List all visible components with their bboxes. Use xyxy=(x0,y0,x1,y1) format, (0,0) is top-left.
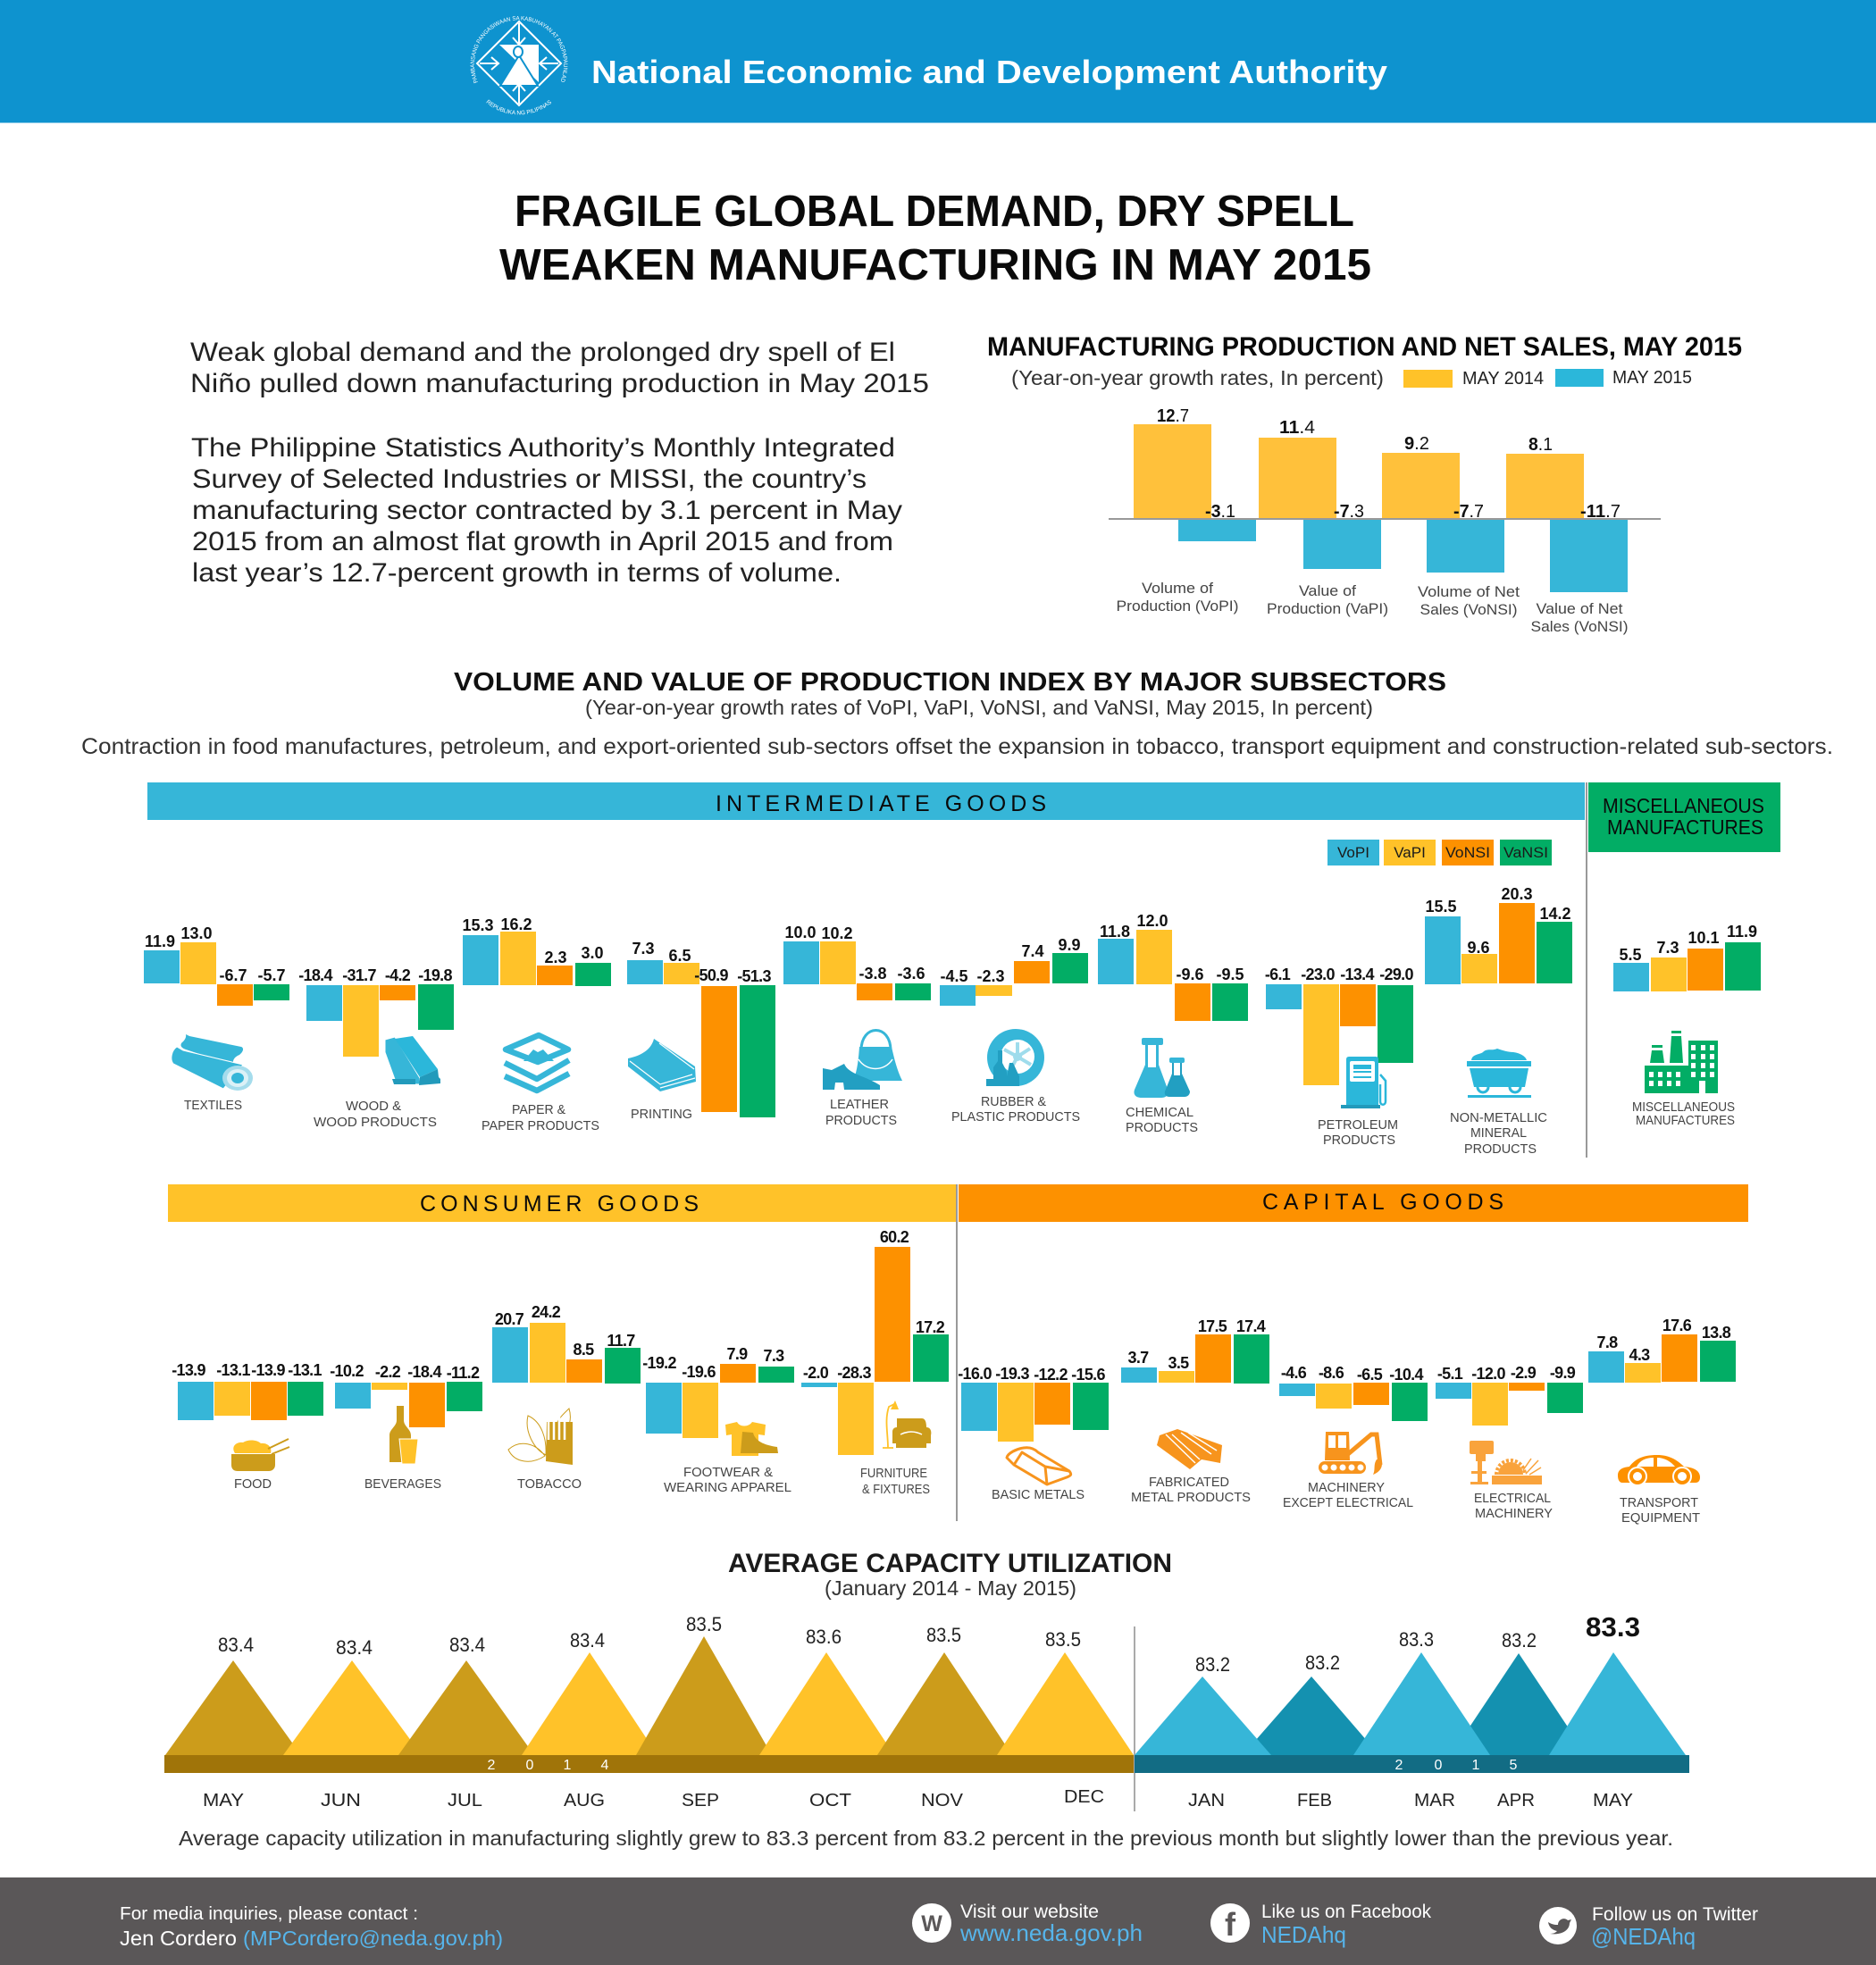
label: paper xyxy=(482,1102,599,1133)
bars: miscellaneous: 11.9 xyxy=(1727,923,1757,941)
intro text block: manufacturing sector contracted by 3.1 percent in May xyxy=(192,496,902,525)
label: electrical machinery: MACHINERY xyxy=(1475,1506,1553,1521)
band: capital goods xyxy=(959,1184,1748,1222)
capacity heading xyxy=(728,1549,1172,1600)
header band xyxy=(0,0,1876,123)
mountain chart: 2015: 83.3 xyxy=(1586,1611,1640,1643)
mountain chart: 2014: 83.4 xyxy=(336,1636,373,1659)
bars: footwear: 7.3 xyxy=(764,1347,784,1365)
mountain chart: 2014: 0 xyxy=(526,1758,534,1773)
mountain chart: 2014: NOV xyxy=(921,1791,964,1810)
label: petroleum xyxy=(1318,1117,1398,1148)
bars: wood: -4.2 xyxy=(385,966,411,984)
website link: W xyxy=(921,1911,942,1936)
bars: petroleum: -23.0 xyxy=(1301,966,1335,983)
bars: printing: 7.3 xyxy=(632,940,655,957)
mountain chart: 2015: JAN xyxy=(1188,1791,1225,1810)
intro text block: Weak global demand and the prolonged dry spell of El xyxy=(190,338,895,367)
icon: NEDA logo: PAMBANSANG PANGASIWAAN SA KABUHAYAN AT PAGPAPAUNLAD xyxy=(470,16,568,84)
bars: fabricated metal: 17.5 xyxy=(1198,1317,1227,1335)
icon: metal ingot xyxy=(1007,1448,1071,1484)
band: intermediate goods xyxy=(147,782,1585,820)
bars: textiles: -5.7 xyxy=(257,966,286,984)
label: rubber and plastic: RUBBER & xyxy=(981,1094,1046,1109)
bars: paper: 15.3 xyxy=(462,916,494,934)
footer xyxy=(0,1877,1876,1965)
bars: beverages: -2.2 xyxy=(375,1363,401,1381)
mountain chart: 2014: 83.4 xyxy=(218,1634,254,1656)
bars: furniture: -28.3 xyxy=(837,1364,871,1382)
media contact: Jen Cordero xyxy=(120,1927,237,1950)
bars: paper: 3.0 xyxy=(581,944,604,962)
mountain chart: 2015: 0 xyxy=(1435,1758,1443,1773)
mountain chart: 2014: SEP xyxy=(682,1791,719,1810)
label: rubber and plastic: PLASTIC PRODUCTS xyxy=(951,1109,1080,1125)
legend: index colors: VoPI xyxy=(1337,844,1369,861)
bars: food: -13.9 xyxy=(172,1361,205,1379)
bars: miscellaneous xyxy=(1613,923,1761,991)
bars: chemical: 12.0 xyxy=(1136,912,1168,930)
mountain chart: 2015: 83.2 xyxy=(1502,1629,1537,1651)
bars: non-metallic: 14.2 xyxy=(1539,905,1571,923)
section heading: production index: Contraction in food manufactures, petroleum, and export-oriented sub-sectors offset the expansion in tobacco, transport equipment and construction-related sub-sectors. xyxy=(81,734,1833,759)
bars: wood: -31.7 xyxy=(342,966,376,984)
twitter link: @NEDAhq xyxy=(1591,1923,1696,1950)
bars: footwear: 7.9 xyxy=(727,1345,748,1363)
label: leather xyxy=(825,1097,897,1128)
bars: wood: -18.4 xyxy=(298,966,332,984)
label: transport: EQUIPMENT xyxy=(1621,1510,1700,1526)
main title xyxy=(499,188,1371,289)
main title: WEAKEN MANUFACTURING IN MAY 2015 xyxy=(499,241,1371,289)
media contact xyxy=(120,1904,503,1950)
bars: chemical: -9.6 xyxy=(1176,966,1204,983)
media contact: For media inquiries, please contact : xyxy=(120,1904,418,1924)
bars: machinery: -8.6 xyxy=(1319,1364,1344,1382)
bars: non-metallic: 20.3 xyxy=(1501,885,1533,903)
bars: leather: 10.2 xyxy=(821,924,853,942)
bars: electrical machinery: -5.1 xyxy=(1437,1365,1463,1383)
bars: transport xyxy=(1588,1317,1736,1383)
label: paper: PAPER & xyxy=(512,1102,565,1117)
bar chart: 9.2 xyxy=(1404,434,1429,454)
label: non-metallic: NON-METALLIC xyxy=(1450,1110,1547,1125)
bars: footwear: -19.6 xyxy=(682,1363,716,1381)
legend: MAY 2015 xyxy=(1612,368,1692,388)
label: non-metallic: MINERAL xyxy=(1470,1125,1527,1141)
bars: food: -13.9 xyxy=(251,1361,285,1379)
bar chart: Sales (VoNSI) xyxy=(1531,618,1628,635)
bars: electrical machinery: -9.9 xyxy=(1550,1364,1576,1382)
intro text block: 2015 from an almost flat growth in April 2015 and from xyxy=(192,527,893,556)
label: wood: WOOD & xyxy=(346,1099,401,1114)
intro text block: Niño pulled down manufacturing production in May 2015 xyxy=(190,369,929,398)
label: leather: LEATHER xyxy=(830,1097,889,1112)
bars: rubber and plastic: -4.5 xyxy=(940,967,968,985)
label: miscellaneous: MISCELLANEOUS xyxy=(1632,1100,1735,1115)
icon: NEDA logo: REPUBLIKA NG PILIPINAS xyxy=(486,100,551,114)
label: footwear: WEARING APPAREL xyxy=(664,1480,791,1495)
label: non-metallic xyxy=(1450,1110,1547,1157)
chart subtitle: (Year-on-year growth rates, In percent) xyxy=(1011,366,1384,389)
label: textiles: TEXTILES xyxy=(184,1098,242,1113)
capacity heading: (January 2014 - May 2015) xyxy=(825,1576,1076,1600)
bar chart: 8.1 xyxy=(1528,435,1553,455)
bars: transport: 4.3 xyxy=(1629,1346,1650,1364)
bars: textiles: -6.7 xyxy=(219,966,247,984)
legend: index colors: VaNSI xyxy=(1503,844,1548,861)
label: electrical machinery xyxy=(1474,1491,1553,1521)
mountain chart: 2015: 83.2 xyxy=(1195,1653,1230,1676)
bar chart: Production (VoPI) xyxy=(1117,598,1238,615)
bars: leather xyxy=(783,924,931,1000)
facebook link: f xyxy=(1225,1906,1236,1943)
bars: leather: 10.0 xyxy=(784,924,817,941)
bars: tobacco: 24.2 xyxy=(532,1303,561,1321)
label: footwear: FOOTWEAR & xyxy=(683,1465,773,1480)
bar chart: Production (VaPI) xyxy=(1267,600,1388,617)
label: leather: PRODUCTS xyxy=(825,1113,897,1128)
band: consumer goods xyxy=(168,1184,956,1222)
mountain chart: 2015: 5 xyxy=(1510,1758,1518,1773)
mountain chart: 2015: MAR xyxy=(1414,1791,1455,1810)
legend: MAY 2014 xyxy=(1462,369,1544,389)
intro text block: The Philippine Statistics Authority’s Monthly Integrated xyxy=(191,433,895,463)
bars: furniture: -2.0 xyxy=(803,1364,829,1382)
bars: beverages xyxy=(330,1362,482,1427)
label: chemical: CHEMICAL xyxy=(1126,1105,1193,1120)
legend: index colors: VoNSI xyxy=(1445,844,1490,861)
bars: leather: -3.6 xyxy=(897,965,925,982)
intro text block xyxy=(190,338,929,588)
icon: flasks xyxy=(1134,1038,1190,1098)
mountain chart: 2015: 83.2 xyxy=(1305,1651,1340,1674)
bars: beverages: -10.2 xyxy=(330,1362,364,1380)
panel: manufacturing production and net sales xyxy=(987,332,1742,635)
chart heading: MANUFACTURING PRODUCTION AND NET SALES, MAY 2015 xyxy=(987,332,1742,362)
icon: shirt and boot xyxy=(725,1422,778,1456)
mountain chart: 2014: 83.4 xyxy=(570,1629,605,1651)
bars: tobacco: 8.5 xyxy=(574,1341,594,1359)
band: capital goods: CAPITAL GOODS xyxy=(1262,1190,1503,1215)
bars: electrical machinery xyxy=(1436,1364,1583,1426)
bars: miscellaneous: 7.3 xyxy=(1656,939,1679,957)
bars: paper: 2.3 xyxy=(544,949,567,966)
bars: petroleum: -29.0 xyxy=(1379,966,1413,983)
section heading: production index: VOLUME AND VALUE OF PRODUCTION INDEX BY MAJOR SUBSECTORS xyxy=(454,668,1446,697)
bars: footwear: -19.2 xyxy=(642,1354,676,1372)
bar chart: -7.7 xyxy=(1453,502,1484,522)
bars: food: -13.1 xyxy=(288,1361,322,1379)
label: electrical machinery: ELECTRICAL xyxy=(1474,1491,1551,1506)
website link: www.neda.gov.ph xyxy=(959,1919,1143,1946)
icon: tobacco leaves and pack xyxy=(508,1409,573,1465)
bars: basic metals xyxy=(958,1365,1109,1442)
mountain chart: 2014: MAY xyxy=(203,1791,244,1810)
label: food: FOOD xyxy=(234,1476,272,1492)
panel: consumer goods xyxy=(168,1184,956,1497)
bars: transport: 13.8 xyxy=(1702,1324,1731,1342)
band: miscellaneous: MANUFACTURES xyxy=(1607,815,1763,839)
mountain chart: 2014: JUL xyxy=(448,1791,482,1810)
bars: machinery: -4.6 xyxy=(1281,1364,1307,1382)
bars: beverages: -18.4 xyxy=(407,1363,441,1381)
label: wood xyxy=(314,1099,437,1130)
bars: non-metallic xyxy=(1425,885,1572,984)
bars: fabricated metal xyxy=(1121,1317,1269,1384)
icon: newspaper xyxy=(628,1039,696,1091)
label: fabricated metal xyxy=(1131,1475,1251,1505)
bars: basic metals: -16.0 xyxy=(958,1365,992,1383)
icon: factory xyxy=(1645,1031,1718,1093)
bars: petroleum xyxy=(1265,966,1413,1085)
label: non-metallic: PRODUCTS xyxy=(1464,1141,1537,1157)
icon: mine cart xyxy=(1467,1049,1531,1098)
label: paper: PAPER PRODUCTS xyxy=(482,1118,599,1133)
icon: bag and shoe xyxy=(823,1031,902,1090)
bar chart: -11.7 xyxy=(1580,502,1621,522)
bars: printing: -51.3 xyxy=(737,967,771,985)
bars: machinery xyxy=(1279,1364,1428,1421)
panel: capital goods xyxy=(958,1184,1748,1526)
label: furniture: FURNITURE xyxy=(860,1466,927,1481)
icon: car xyxy=(1618,1455,1700,1485)
band: intermediate goods: INTERMEDIATE GOODS xyxy=(716,791,1046,816)
bars: transport: 17.6 xyxy=(1662,1317,1692,1334)
capacity heading: AVERAGE CAPACITY UTILIZATION xyxy=(728,1549,1172,1578)
section heading: production index xyxy=(81,668,1833,759)
bars: wood xyxy=(298,966,454,1057)
mountain chart: 2014: 83.5 xyxy=(1045,1628,1081,1651)
facebook link: NEDAhq xyxy=(1261,1921,1346,1948)
legend: index colors xyxy=(1327,840,1552,865)
bars: wood: -19.8 xyxy=(418,966,452,984)
bars: food: -13.1 xyxy=(216,1361,250,1379)
bars: furniture: 17.2 xyxy=(916,1318,945,1336)
bars: furniture: 60.2 xyxy=(880,1228,909,1246)
icon: wood planks xyxy=(385,1036,440,1085)
bars: fabricated metal: 17.4 xyxy=(1236,1317,1266,1335)
label: transport xyxy=(1620,1495,1700,1526)
bars: textiles xyxy=(144,924,289,1006)
icon: tyre and bottles xyxy=(986,1029,1044,1086)
intro text block: Survey of Selected Industries or MISSI, the country’s xyxy=(192,464,867,494)
label: footwear xyxy=(664,1465,791,1495)
bars: tobacco: 20.7 xyxy=(495,1310,524,1328)
mountain chart: 2014: AUG xyxy=(564,1791,605,1810)
label: fabricated metal: METAL PRODUCTS xyxy=(1131,1490,1251,1505)
bars: food xyxy=(172,1361,323,1420)
mountain chart: 2014 xyxy=(164,1613,1134,1810)
mountain chart: 2015: 2 xyxy=(1395,1758,1403,1773)
bar chart: 12.7 xyxy=(1157,406,1189,426)
label: petroleum: PRODUCTS xyxy=(1323,1133,1395,1148)
bars: machinery: -6.5 xyxy=(1357,1366,1383,1384)
bar chart: Sales (VoNSI) xyxy=(1420,601,1517,618)
mountain chart: 2015: 83.3 xyxy=(1399,1628,1434,1651)
legend xyxy=(1403,368,1692,389)
panel: average capacity utilization xyxy=(164,1549,1689,1850)
bars: petroleum: -6.1 xyxy=(1265,966,1291,983)
label: machinery xyxy=(1283,1480,1413,1510)
twitter link xyxy=(1539,1904,1758,1950)
mountain chart: 2014: 4 xyxy=(601,1758,609,1773)
bar chart: Volume of Net xyxy=(1418,583,1520,600)
bars: chemical: -9.5 xyxy=(1216,966,1244,983)
bar chart xyxy=(1109,406,1661,635)
bars: footwear xyxy=(642,1345,794,1438)
bars: basic metals: -15.6 xyxy=(1071,1366,1105,1384)
bars: fabricated metal: 3.7 xyxy=(1128,1349,1149,1367)
mountain chart: 2014: JUN xyxy=(321,1791,361,1810)
bars: tobacco xyxy=(492,1303,641,1384)
icon: textile roll xyxy=(172,1034,253,1091)
bars: fabricated metal: 3.5 xyxy=(1168,1354,1189,1372)
facebook link xyxy=(1210,1902,1431,1948)
bars: textiles: 13.0 xyxy=(180,924,213,942)
bars: printing: 6.5 xyxy=(668,947,691,965)
icon: rice bowl xyxy=(231,1439,289,1471)
bar chart: Value of xyxy=(1299,582,1356,599)
mountain chart: 2015: FEB xyxy=(1297,1791,1332,1810)
bars: beverages: -11.2 xyxy=(447,1364,480,1382)
bars: printing xyxy=(627,940,775,1117)
header title: National Economic and Development Authority xyxy=(591,54,1387,90)
icon: steel beams xyxy=(1157,1429,1222,1469)
bars: miscellaneous: 10.1 xyxy=(1688,929,1720,947)
bars: rubber and plastic: -2.3 xyxy=(976,967,1005,985)
label: petroleum: PETROLEUM xyxy=(1318,1117,1398,1133)
facebook link: Like us on Facebook xyxy=(1261,1902,1431,1922)
legend: index colors: VaPI xyxy=(1394,844,1426,861)
bars: petroleum: -13.4 xyxy=(1340,966,1374,983)
panel: intermediate goods xyxy=(144,782,1585,1157)
bars: rubber and plastic xyxy=(940,936,1088,1006)
mountain chart: 2014: 2 xyxy=(488,1758,496,1773)
label: beverages: BEVERAGES xyxy=(364,1476,441,1492)
icon: paper stack xyxy=(505,1035,569,1091)
mountain chart: 2014: 83.5 xyxy=(926,1624,961,1646)
bars: tobacco: 11.7 xyxy=(607,1332,635,1350)
label: furniture: & FIXTURES xyxy=(862,1482,930,1497)
bars: machinery: -10.4 xyxy=(1389,1366,1423,1384)
capacity note: Average capacity utilization in manufacturing slightly grew to 83.3 percent from 83.2 percent in the previous month but slightly lower than the previous year. xyxy=(179,1827,1673,1850)
mountain chart: 2014: 83.5 xyxy=(686,1613,722,1635)
label: rubber and plastic xyxy=(951,1094,1080,1125)
website link xyxy=(912,1902,1143,1946)
media contact: (MPCordero@neda.gov.ph) xyxy=(243,1927,503,1950)
bar chart: -7.3 xyxy=(1334,502,1364,522)
label: miscellaneous: MANUFACTURES xyxy=(1636,1113,1735,1128)
label: wood: WOOD PRODUCTS xyxy=(314,1115,437,1130)
bars: textiles: 11.9 xyxy=(145,932,175,950)
label: tobacco: TOBACCO xyxy=(517,1476,582,1492)
label: machinery: EXCEPT ELECTRICAL xyxy=(1283,1495,1413,1510)
mountain chart: 2014: DEC xyxy=(1064,1787,1104,1807)
website link: Visit our website xyxy=(960,1902,1099,1922)
bars: non-metallic: 9.6 xyxy=(1467,939,1490,957)
mountain chart: 2014: 1 xyxy=(564,1758,572,1773)
label: chemical: PRODUCTS xyxy=(1126,1120,1198,1135)
band: miscellaneous xyxy=(1588,782,1780,852)
label: printing: PRINTING xyxy=(631,1107,692,1122)
bars: basic metals: -12.2 xyxy=(1034,1366,1068,1384)
icon: drill press and saw xyxy=(1470,1441,1542,1484)
mountain chart: 2015: 1 xyxy=(1472,1758,1480,1773)
icon: lamp and armchair xyxy=(883,1401,931,1448)
bars: rubber and plastic: 7.4 xyxy=(1021,942,1044,960)
bars: leather: -3.8 xyxy=(858,965,887,982)
bars: paper xyxy=(462,916,611,986)
section heading: production index: (Year-on-year growth rates of VoPI, VaPI, VoNSI, and VaNSI, May 2015, In percent) xyxy=(585,696,1373,719)
mountain chart: 2014: 83.4 xyxy=(449,1634,485,1656)
icon: NEDA logo xyxy=(470,16,568,114)
label: miscellaneous xyxy=(1632,1100,1735,1128)
panel: miscellaneous manufactures xyxy=(1588,782,1780,1128)
label: fabricated metal: FABRICATED xyxy=(1149,1475,1229,1490)
icon: bottle and cup xyxy=(389,1406,418,1464)
label: furniture xyxy=(860,1466,930,1497)
icon: fuel pump xyxy=(1341,1057,1386,1108)
mountain chart: 2015: APR xyxy=(1497,1791,1535,1810)
bars: electrical machinery: -12.0 xyxy=(1471,1365,1505,1383)
mountain chart: 2015 xyxy=(1135,1611,1689,1810)
bars: miscellaneous: 5.5 xyxy=(1619,946,1642,964)
bars: furniture xyxy=(801,1228,949,1455)
main title: FRAGILE GLOBAL DEMAND, DRY SPELL xyxy=(515,188,1354,236)
mountain chart: 2014: 83.6 xyxy=(806,1626,842,1648)
label: chemical xyxy=(1126,1105,1198,1135)
bars: non-metallic: 15.5 xyxy=(1425,898,1457,916)
bar chart: -3.1 xyxy=(1205,502,1235,522)
bars: transport: 7.8 xyxy=(1597,1334,1618,1351)
twitter link: Follow us on Twitter xyxy=(1592,1904,1758,1925)
mountain chart: 2014: OCT xyxy=(809,1791,851,1810)
bar chart: 11.4 xyxy=(1279,418,1315,438)
bars: basic metals: -19.3 xyxy=(995,1365,1029,1383)
icon: excavator xyxy=(1319,1432,1382,1475)
bars: paper: 16.2 xyxy=(500,916,532,933)
bars: rubber and plastic: 9.9 xyxy=(1058,936,1081,954)
bars: printing: -50.9 xyxy=(694,966,728,984)
bars: chemical xyxy=(1098,912,1248,1021)
band: miscellaneous: MISCELLANEOUS xyxy=(1603,794,1764,817)
bar chart: Volume of xyxy=(1142,580,1213,597)
bars: electrical machinery: -2.9 xyxy=(1511,1364,1537,1382)
label: machinery: MACHINERY xyxy=(1308,1480,1385,1495)
mountain chart: 2015: MAY xyxy=(1593,1791,1633,1810)
intro text block: last year’s 12.7-percent growth in terms of volume. xyxy=(192,558,842,588)
band: consumer goods: CONSUMER GOODS xyxy=(420,1192,699,1217)
bar chart: Value of Net xyxy=(1537,600,1623,617)
label: transport: TRANSPORT xyxy=(1620,1495,1698,1510)
label: basic metals: BASIC METALS xyxy=(992,1487,1085,1502)
bars: chemical: 11.8 xyxy=(1100,923,1130,941)
